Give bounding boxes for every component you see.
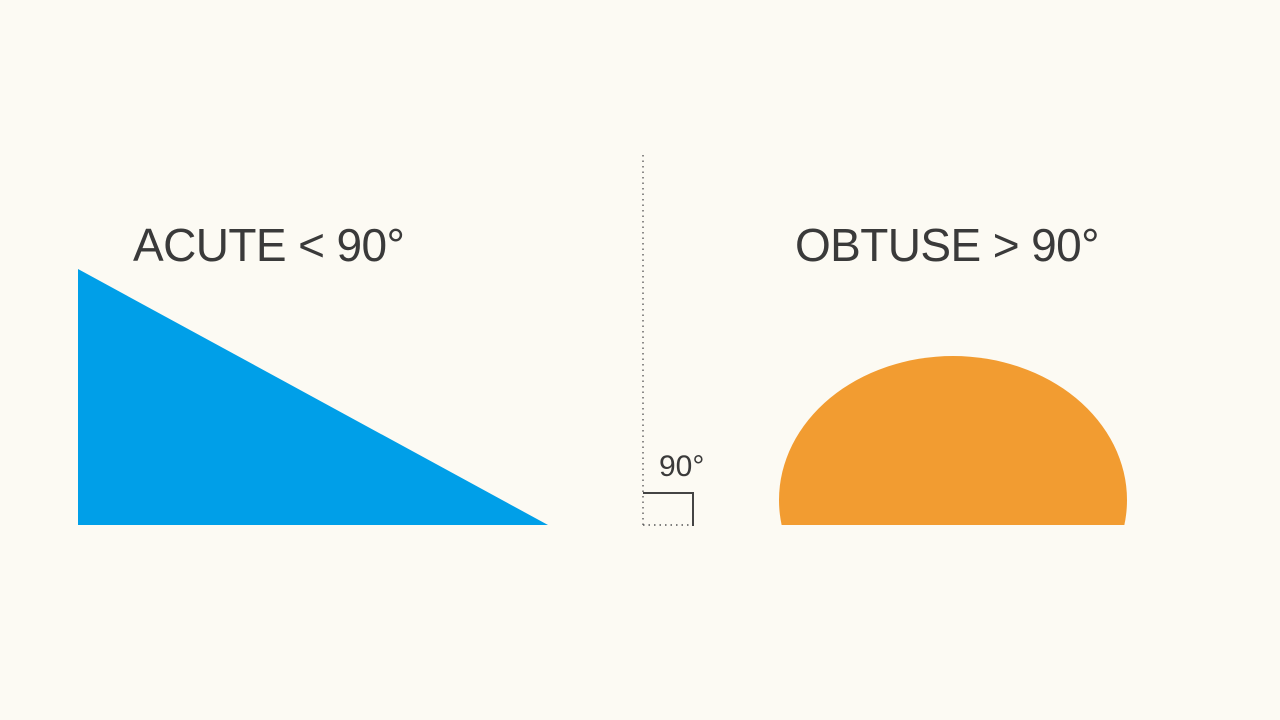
acute triangle xyxy=(78,269,548,525)
label: 90 degrees: 90° xyxy=(659,450,704,483)
right angle marker xyxy=(643,155,693,526)
obtuse semi shape xyxy=(779,356,1127,525)
title: acute: ACUTE < 90° xyxy=(133,219,404,271)
shapes drawing xyxy=(78,155,1127,526)
title: obtuse: OBTUSE > 90° xyxy=(795,219,1099,271)
